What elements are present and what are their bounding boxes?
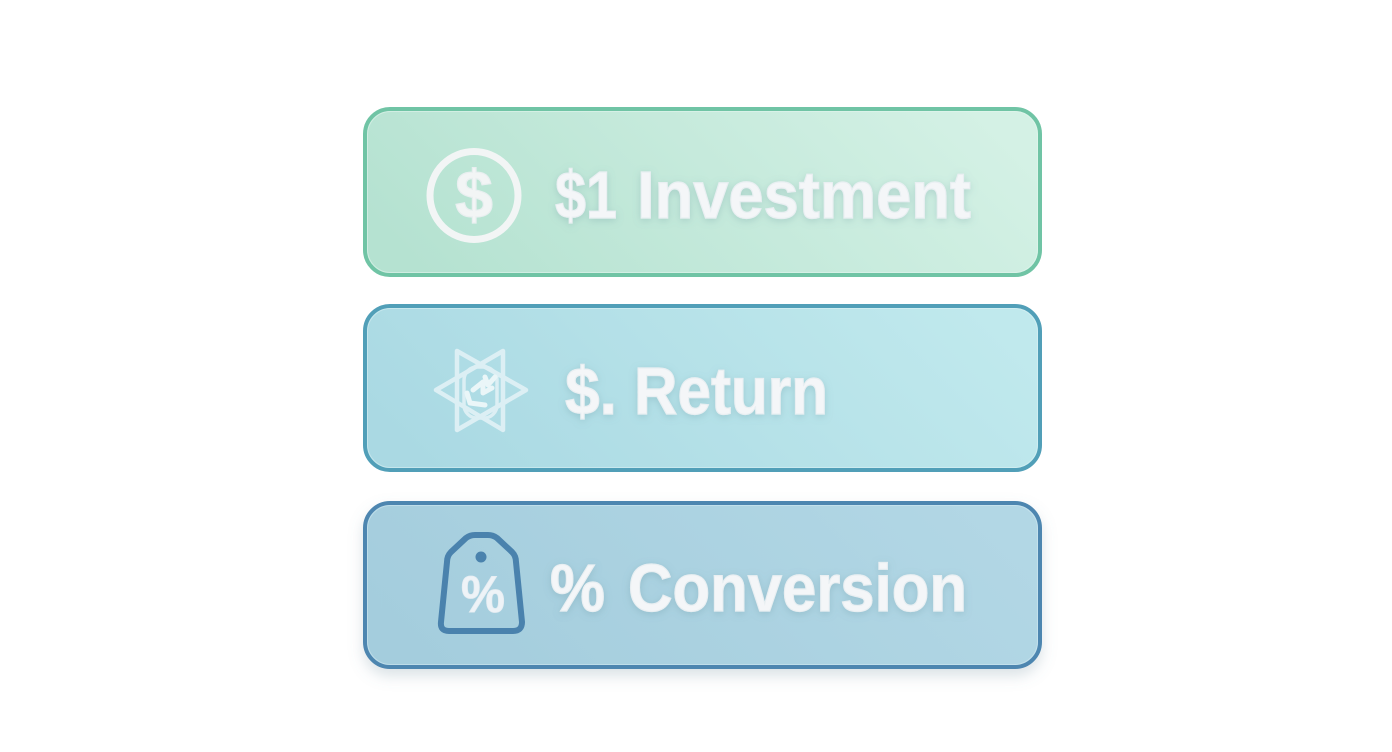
label: $. Return — [565, 354, 828, 429]
icon: percent price tag: % — [461, 566, 505, 624]
icon: six-pointed star with arrows — [436, 351, 526, 430]
panel: Conversion — [365, 503, 1040, 667]
card: teal background — [365, 306, 1040, 470]
icon: dollar coin: $ — [455, 157, 493, 233]
icon: percent price tag — [441, 535, 522, 631]
label: % Conversion: % — [550, 551, 605, 626]
icon: dollar coin — [430, 152, 518, 240]
label: % Conversion: Conversion — [628, 551, 967, 626]
card: green background — [365, 109, 1040, 275]
panel: $1 Investment — [365, 109, 1040, 275]
card: blue background — [365, 503, 1040, 667]
label: $1 Investment: Investment — [637, 158, 971, 233]
label: $. Return: Return — [634, 354, 828, 429]
label: $. Return: $. — [565, 354, 617, 429]
panel: Return — [365, 306, 1040, 470]
label: $1 Investment: $1 — [555, 158, 617, 233]
